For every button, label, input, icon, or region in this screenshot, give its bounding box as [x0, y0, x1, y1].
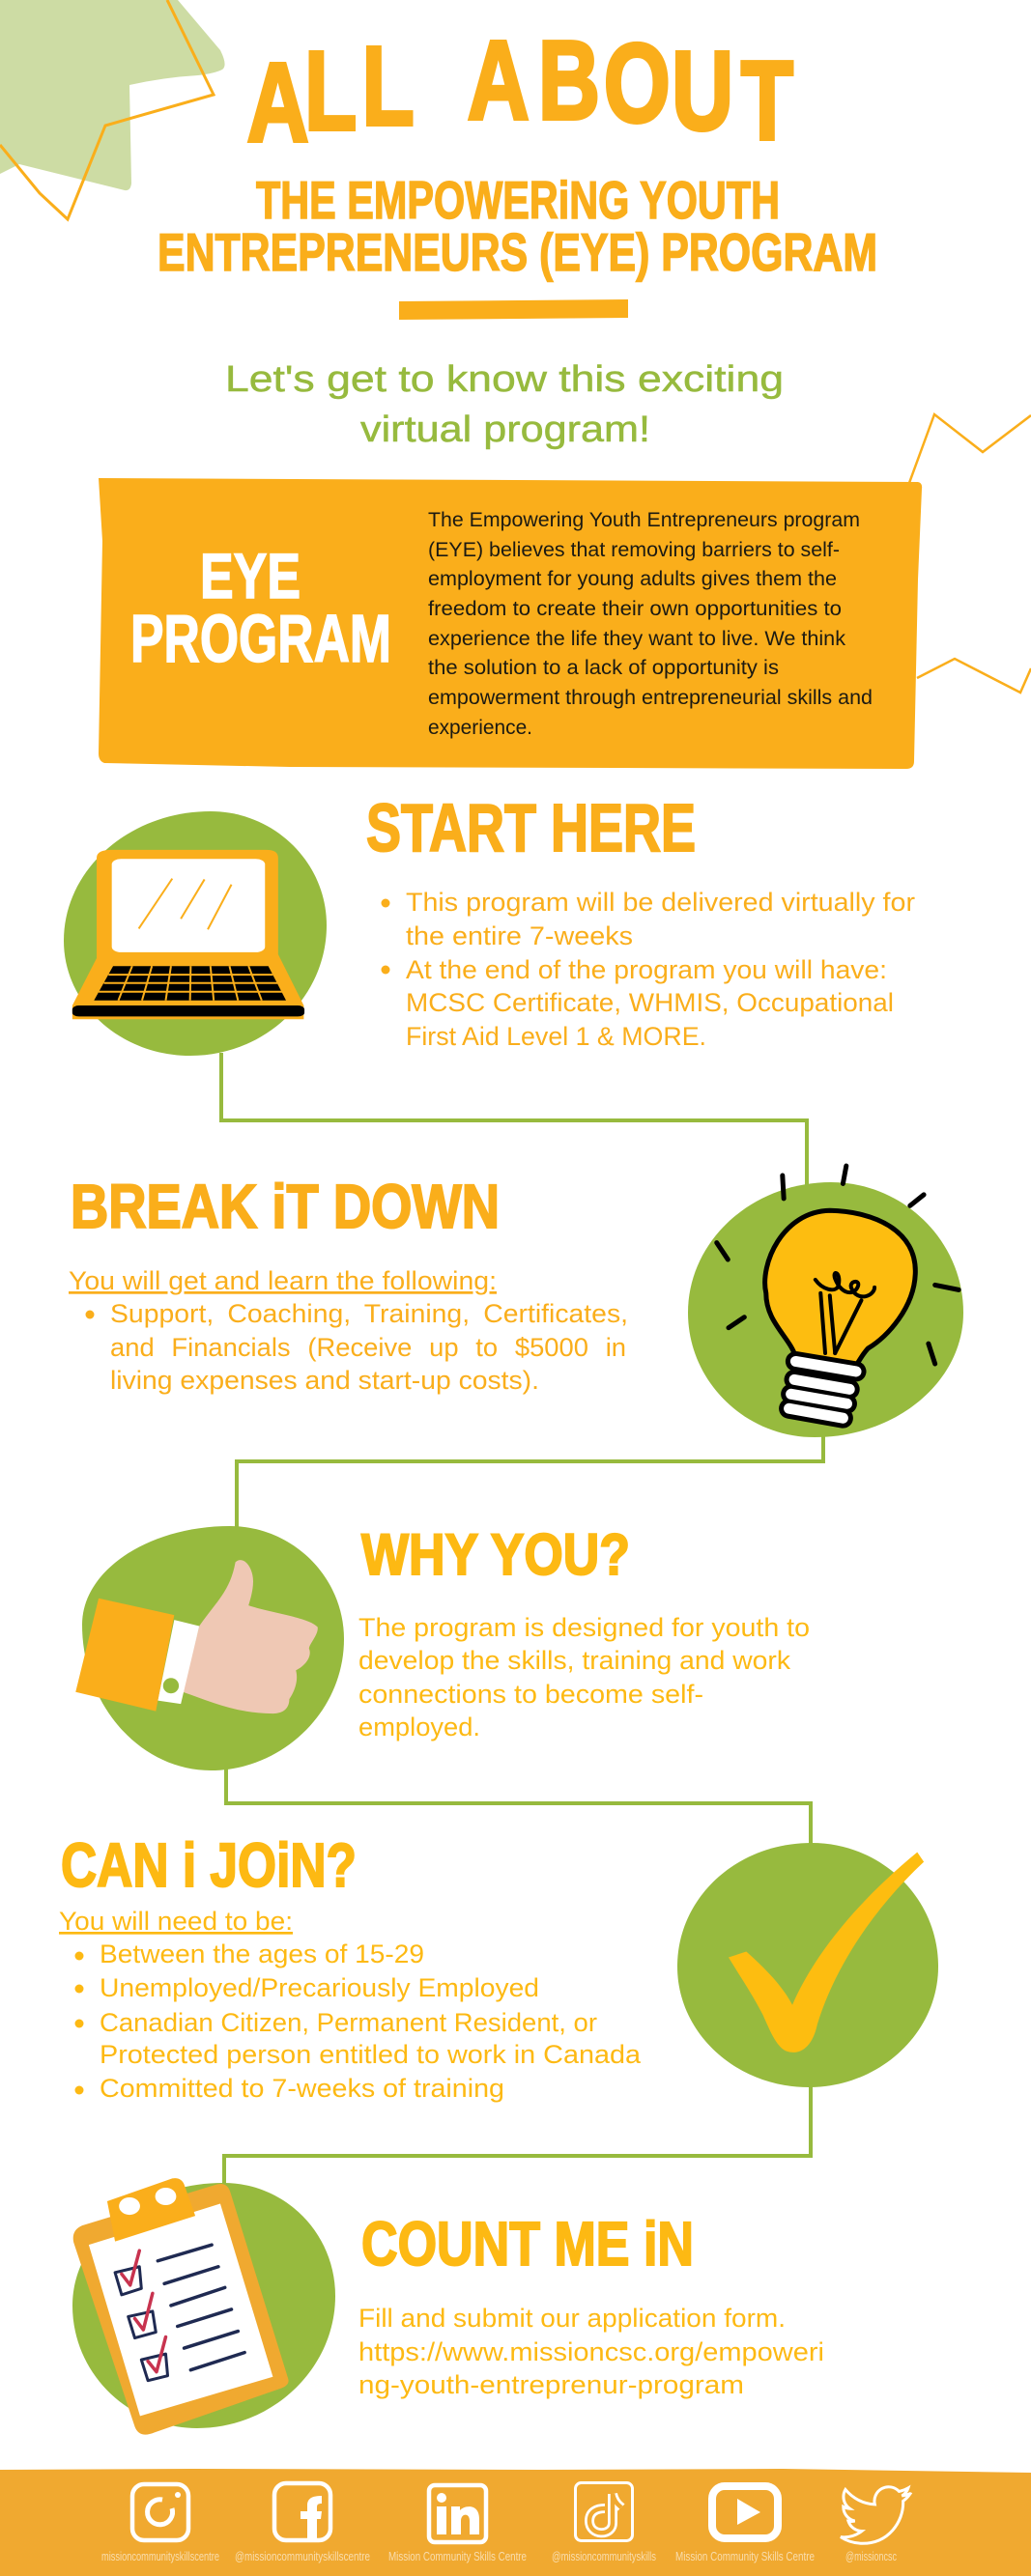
connector lines between steps	[221, 1053, 823, 2187]
social handles: @missioncommunityskillscentre	[235, 2549, 370, 2563]
step: why you	[75, 1522, 810, 1770]
icon: tiktok	[576, 2482, 632, 2540]
panel description: experience the life they want to live. We think	[428, 628, 846, 650]
bullet list: Canadian Citizen, Permanent Resident, or	[100, 2008, 597, 2037]
green blob	[677, 1843, 938, 2087]
bullet list: At the end of the program you will have:	[406, 955, 887, 984]
bullet list: This program will be delivered virtually for	[406, 888, 915, 917]
panel: EYE program intro	[99, 478, 922, 769]
bullet list: First Aid Level 1 & MORE.	[406, 1022, 706, 1051]
list intro: You will get and learn the following:	[69, 1266, 497, 1295]
heading: START HERE	[366, 790, 696, 865]
icon: thumbs up	[75, 1560, 318, 1713]
panel description: employment for young adults gives them the	[428, 568, 837, 590]
bullet list: Support, Coaching, Training, Certificates,	[110, 1299, 628, 1328]
panel description: (EYE) believes that removing barriers to self-	[428, 539, 840, 561]
step: can i join	[59, 1830, 938, 2103]
step: count me in	[72, 2178, 824, 2435]
green blob	[82, 1526, 344, 1770]
heading: WHY YOU?	[361, 1522, 630, 1587]
footer: social links	[0, 2469, 1031, 2576]
step: start here	[64, 790, 915, 1056]
subtitle: THE EMPOWERiNG YOUTH	[256, 170, 780, 230]
title: ALL ABOUT	[247, 17, 793, 165]
footer background	[0, 2469, 1031, 2576]
bullet list: MCSC Certificate, WHMIS, Occupational	[406, 988, 894, 1017]
panel heading: PROGRAM	[130, 601, 391, 676]
decorative green blob top left	[0, 0, 225, 190]
panel description: the solution to a lack of opportunity is	[428, 657, 779, 679]
bullet list: Between the ages of 15-29	[100, 1939, 424, 1968]
bullet list	[381, 888, 915, 1051]
step: break it down	[69, 1166, 963, 1437]
description with link	[358, 2304, 824, 2399]
social handles: @missioncommunityskills	[552, 2549, 656, 2563]
social handles: missioncommunityskillscentre	[101, 2549, 219, 2563]
subtitle	[158, 170, 877, 282]
heading: BREAK iT DOWN	[71, 1172, 500, 1241]
bullet list: Protected person entitled to work in Canada	[100, 2040, 642, 2069]
bullet list	[85, 1299, 628, 1395]
description: employed.	[358, 1713, 480, 1741]
panel description: empowerment through entrepreneurial skills and	[428, 687, 873, 709]
description: connections to become self-	[358, 1680, 703, 1709]
panel heading: EYE	[200, 540, 301, 611]
icon: twitter	[841, 2487, 910, 2543]
description with link: ng-youth-entreprenur-program	[358, 2370, 744, 2399]
green blob	[64, 811, 327, 1056]
green blob	[72, 2183, 335, 2428]
social handles: Mission Community Skills Centre	[388, 2549, 527, 2563]
icon: linkedin	[429, 2485, 486, 2542]
title underline bar	[399, 299, 628, 320]
icon: instagram	[132, 2484, 188, 2540]
panel description: experience.	[428, 717, 532, 739]
bullet list: Unemployed/Precariously Employed	[100, 1973, 539, 2002]
panel description: freedom to create their own opportunities to	[428, 598, 842, 620]
intro tagline: Let's get to know this exciting	[225, 359, 784, 400]
panel background	[99, 478, 922, 769]
description with link: Fill and submit our application form.	[358, 2304, 786, 2333]
intro tagline	[225, 359, 784, 450]
description with link: https://www.missioncsc.org/empoweri	[358, 2337, 824, 2366]
green blob	[688, 1182, 963, 1437]
heading: COUNT ME iN	[361, 2209, 694, 2279]
social handles: Mission Community Skills Centre	[675, 2549, 815, 2563]
icon: youtube	[712, 2486, 778, 2538]
description	[358, 1613, 810, 1741]
decorative zigzag top left	[0, 0, 214, 219]
bullet list: the entire 7-weeks	[406, 921, 633, 950]
bullet list: Committed to 7-weeks of training	[100, 2074, 504, 2103]
bullet list: and Financials (Receive up to $5000 in	[110, 1333, 626, 1362]
description: develop the skills, training and work	[358, 1646, 791, 1675]
panel description: The Empowering Youth Entrepreneurs program	[428, 509, 860, 531]
icon: clipboard checklist	[73, 2178, 289, 2435]
icon: light bulb	[717, 1166, 959, 1418]
heading: CAN i JOiN?	[61, 1830, 357, 1900]
social handles: @missioncsc	[845, 2549, 897, 2563]
icon: facebook	[274, 2483, 330, 2540]
decorative zigzag right	[909, 414, 1031, 693]
bullet list	[75, 1939, 642, 2103]
list intro: You will need to be:	[59, 1907, 293, 1936]
intro tagline: virtual program!	[360, 410, 650, 450]
panel description	[428, 509, 873, 739]
description: The program is designed for youth to	[358, 1613, 810, 1642]
social handles	[101, 2549, 897, 2563]
icon: check mark	[729, 1853, 924, 2052]
panel heading	[130, 540, 391, 676]
bullet list: living expenses and start-up costs).	[110, 1366, 539, 1395]
icon: laptop	[72, 850, 304, 1019]
